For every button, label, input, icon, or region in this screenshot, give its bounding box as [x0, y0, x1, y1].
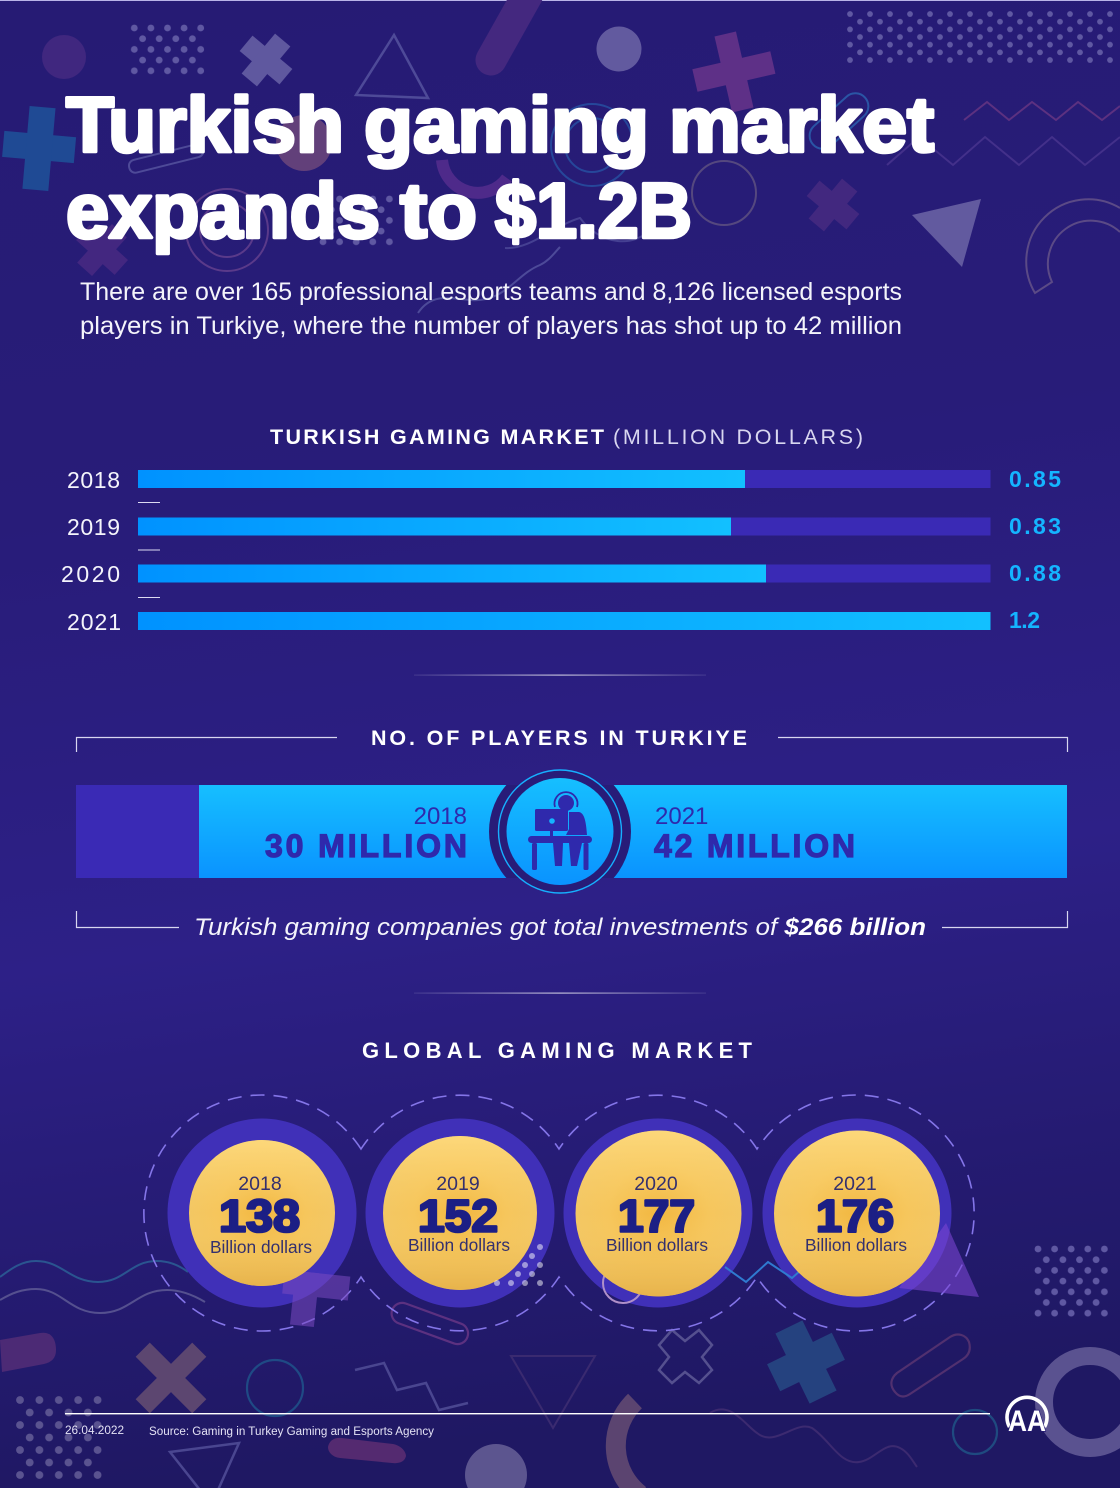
chart heading: TURKISH GAMING MARKET — [270, 425, 604, 449]
title: Turkish — [66, 80, 344, 168]
2021 players value: 42 MILLION — [654, 828, 855, 864]
bar row 2020 — [61, 560, 1061, 587]
bar row 2018: 0.85 — [1009, 466, 1061, 492]
players heading: NO. OF PLAYERS IN TURKIYE — [371, 726, 747, 750]
gold disc 2020: Billion dollars — [606, 1235, 708, 1255]
bar row 2019 — [67, 513, 1061, 540]
chart heading — [270, 425, 863, 449]
title: expands — [66, 166, 380, 254]
icon: gamer at desk — [489, 769, 631, 894]
overlay shapes — [279, 1223, 979, 1330]
dashed outline — [144, 1095, 974, 1331]
2018 players value — [265, 803, 467, 864]
gold disc 2020 — [576, 1130, 742, 1296]
gold disc 2021: 176 — [816, 1190, 894, 1242]
global heading: GLOBAL GAMING MARKET — [362, 1038, 753, 1063]
gold disc 2018 — [189, 1140, 335, 1286]
dot cluster over 2019 disc — [494, 1244, 543, 1286]
decorative shapes: bottom area — [0, 1245, 1120, 1488]
subtitle: players in Turkiye, where the number of players has shot up to 42 million — [80, 312, 902, 340]
bar row 2021: 2021 — [67, 609, 121, 635]
gold disc 2021: 2021 — [833, 1173, 877, 1195]
bar row 2018: 2018 — [67, 467, 120, 493]
investment note: Turkish gaming companies got total investments of $266 billion — [194, 914, 926, 941]
title — [66, 80, 934, 254]
panel: Turkish gaming market bar chart — [61, 425, 1061, 635]
subtitle — [80, 278, 902, 340]
chart heading: (MILLION DOLLARS) — [613, 425, 863, 449]
gold disc 2019: Billion dollars — [408, 1235, 510, 1255]
title: to — [400, 166, 477, 254]
bar row 2021: 1.2 — [1009, 607, 1040, 633]
bar row 2019: 0.83 — [1009, 513, 1061, 539]
gold disc 2019 — [383, 1136, 537, 1290]
2021 players value: 2021 — [655, 803, 708, 830]
bar row 2018 — [67, 466, 1061, 493]
icon: AA logo: AA — [1008, 1405, 1046, 1438]
2021 players value — [654, 803, 855, 864]
date: 26.04.2022 — [65, 1425, 124, 1437]
gold disc 2019: 152 — [418, 1190, 498, 1242]
gold disc 2021 — [774, 1130, 940, 1296]
title: $1.2B — [495, 166, 692, 254]
comparison band — [76, 785, 1067, 878]
panel: global gaming market — [144, 1038, 979, 1331]
footer — [65, 1397, 1047, 1438]
bar row 2020: 2020 — [61, 561, 120, 587]
gold disc 2020: 177 — [618, 1190, 695, 1242]
bar row 2021 — [67, 607, 1040, 635]
bar row 2020: 0.88 — [1009, 560, 1061, 586]
source: Source: Gaming in Turkey Gaming and Esports Agency — [149, 1426, 434, 1438]
decorative shapes: top area — [0, 0, 1120, 313]
title: market — [669, 80, 934, 168]
panel: number of players in Turkiye — [76, 726, 1068, 941]
gold disc 2021: Billion dollars — [805, 1235, 907, 1255]
bar row 2019: 2019 — [67, 514, 120, 540]
gold disc 2018: Billion dollars — [210, 1237, 312, 1257]
gold disc 2018: 2018 — [238, 1173, 282, 1195]
gold disc 2018: 138 — [219, 1190, 300, 1242]
purple rings — [168, 1118, 952, 1308]
gold disc 2019: 2019 — [436, 1173, 480, 1195]
2018 players value: 2018 — [414, 803, 467, 830]
subtitle: There are over 165 professional esports teams and 8,126 licensed esports — [80, 278, 902, 306]
gold disc 2020: 2020 — [634, 1173, 678, 1195]
title: gaming — [364, 80, 649, 168]
2018 players value: 30 MILLION — [265, 828, 467, 864]
